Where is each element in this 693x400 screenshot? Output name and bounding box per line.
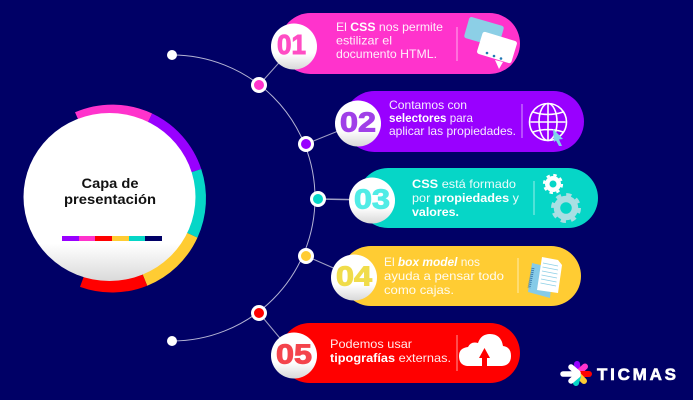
circle title: presentación: [64, 191, 156, 207]
number badge 02: 02: [340, 106, 376, 138]
number badge 01: 01: [277, 29, 306, 60]
number badge 05: 05: [276, 338, 312, 370]
node 4: [298, 248, 314, 264]
panel: item 01: [271, 13, 520, 74]
text block: aplicar las propiedades.: [389, 124, 516, 138]
text block: ayuda a pensar todo: [384, 269, 504, 283]
divider: [456, 335, 458, 371]
circle title: [64, 175, 156, 207]
logo: TICMAS: [563, 364, 676, 384]
pill: [280, 13, 520, 74]
number badge 03: [349, 178, 395, 224]
arc end dot top: [167, 50, 177, 60]
divider: [534, 181, 535, 215]
node 3: [310, 191, 326, 207]
icon: cloud upload: [459, 334, 511, 366]
divider: [522, 104, 523, 138]
text block: por propiedades y: [412, 191, 519, 205]
multicolor ring: [78, 112, 199, 286]
circle title: Capa de: [82, 175, 139, 191]
text block: selectores para: [389, 111, 473, 125]
text block: [336, 20, 443, 61]
text block: [330, 337, 451, 365]
node 1: [251, 77, 267, 93]
number badge 04: 04: [336, 260, 372, 292]
white disc: [24, 113, 196, 281]
pill: [358, 168, 598, 228]
panel: item 03: [349, 168, 598, 228]
pill: [341, 246, 581, 306]
text block: como cajas.: [384, 283, 454, 297]
text block: estilizar el: [336, 34, 392, 48]
logo wordmark: TICMAS: [597, 365, 676, 384]
text block: [389, 98, 516, 138]
panel: central circle: [24, 112, 199, 286]
text block: tipografías externas.: [330, 351, 451, 365]
timeline arc: [172, 55, 315, 341]
panel: item 04: [331, 246, 581, 306]
number badge 05: [271, 332, 317, 378]
icon: gears: [544, 175, 580, 222]
text block: [412, 177, 519, 219]
color bar: [62, 236, 162, 241]
divider: [456, 27, 458, 61]
arc end dot bottom: [167, 336, 177, 346]
text block: valores.: [412, 205, 459, 219]
text block: [384, 255, 504, 297]
logo flower: [563, 364, 589, 383]
text block: Contamos con: [389, 98, 467, 112]
text block: CSS está formado: [412, 177, 516, 191]
pill: [344, 91, 584, 152]
text block: El box model nos: [384, 255, 480, 269]
icon: chat bubbles: [464, 16, 518, 69]
number badge 01: [271, 24, 317, 70]
node 5: [251, 305, 267, 321]
text block: documento HTML.: [336, 47, 437, 61]
connector lines: [259, 46, 372, 355]
divider: [518, 258, 519, 293]
panel: item 05: [271, 323, 520, 383]
text block: Podemos usar: [330, 337, 412, 351]
panel: item 02: [335, 91, 584, 152]
pill: [280, 323, 520, 383]
number badge 03: 03: [354, 184, 390, 214]
icon: documents: [528, 257, 562, 298]
node 2: [298, 136, 314, 152]
number badge 02: [335, 100, 381, 146]
number badge 04: [331, 254, 377, 300]
text block: El CSS nos permite: [336, 20, 443, 34]
icon: globe with cursor: [530, 104, 566, 146]
